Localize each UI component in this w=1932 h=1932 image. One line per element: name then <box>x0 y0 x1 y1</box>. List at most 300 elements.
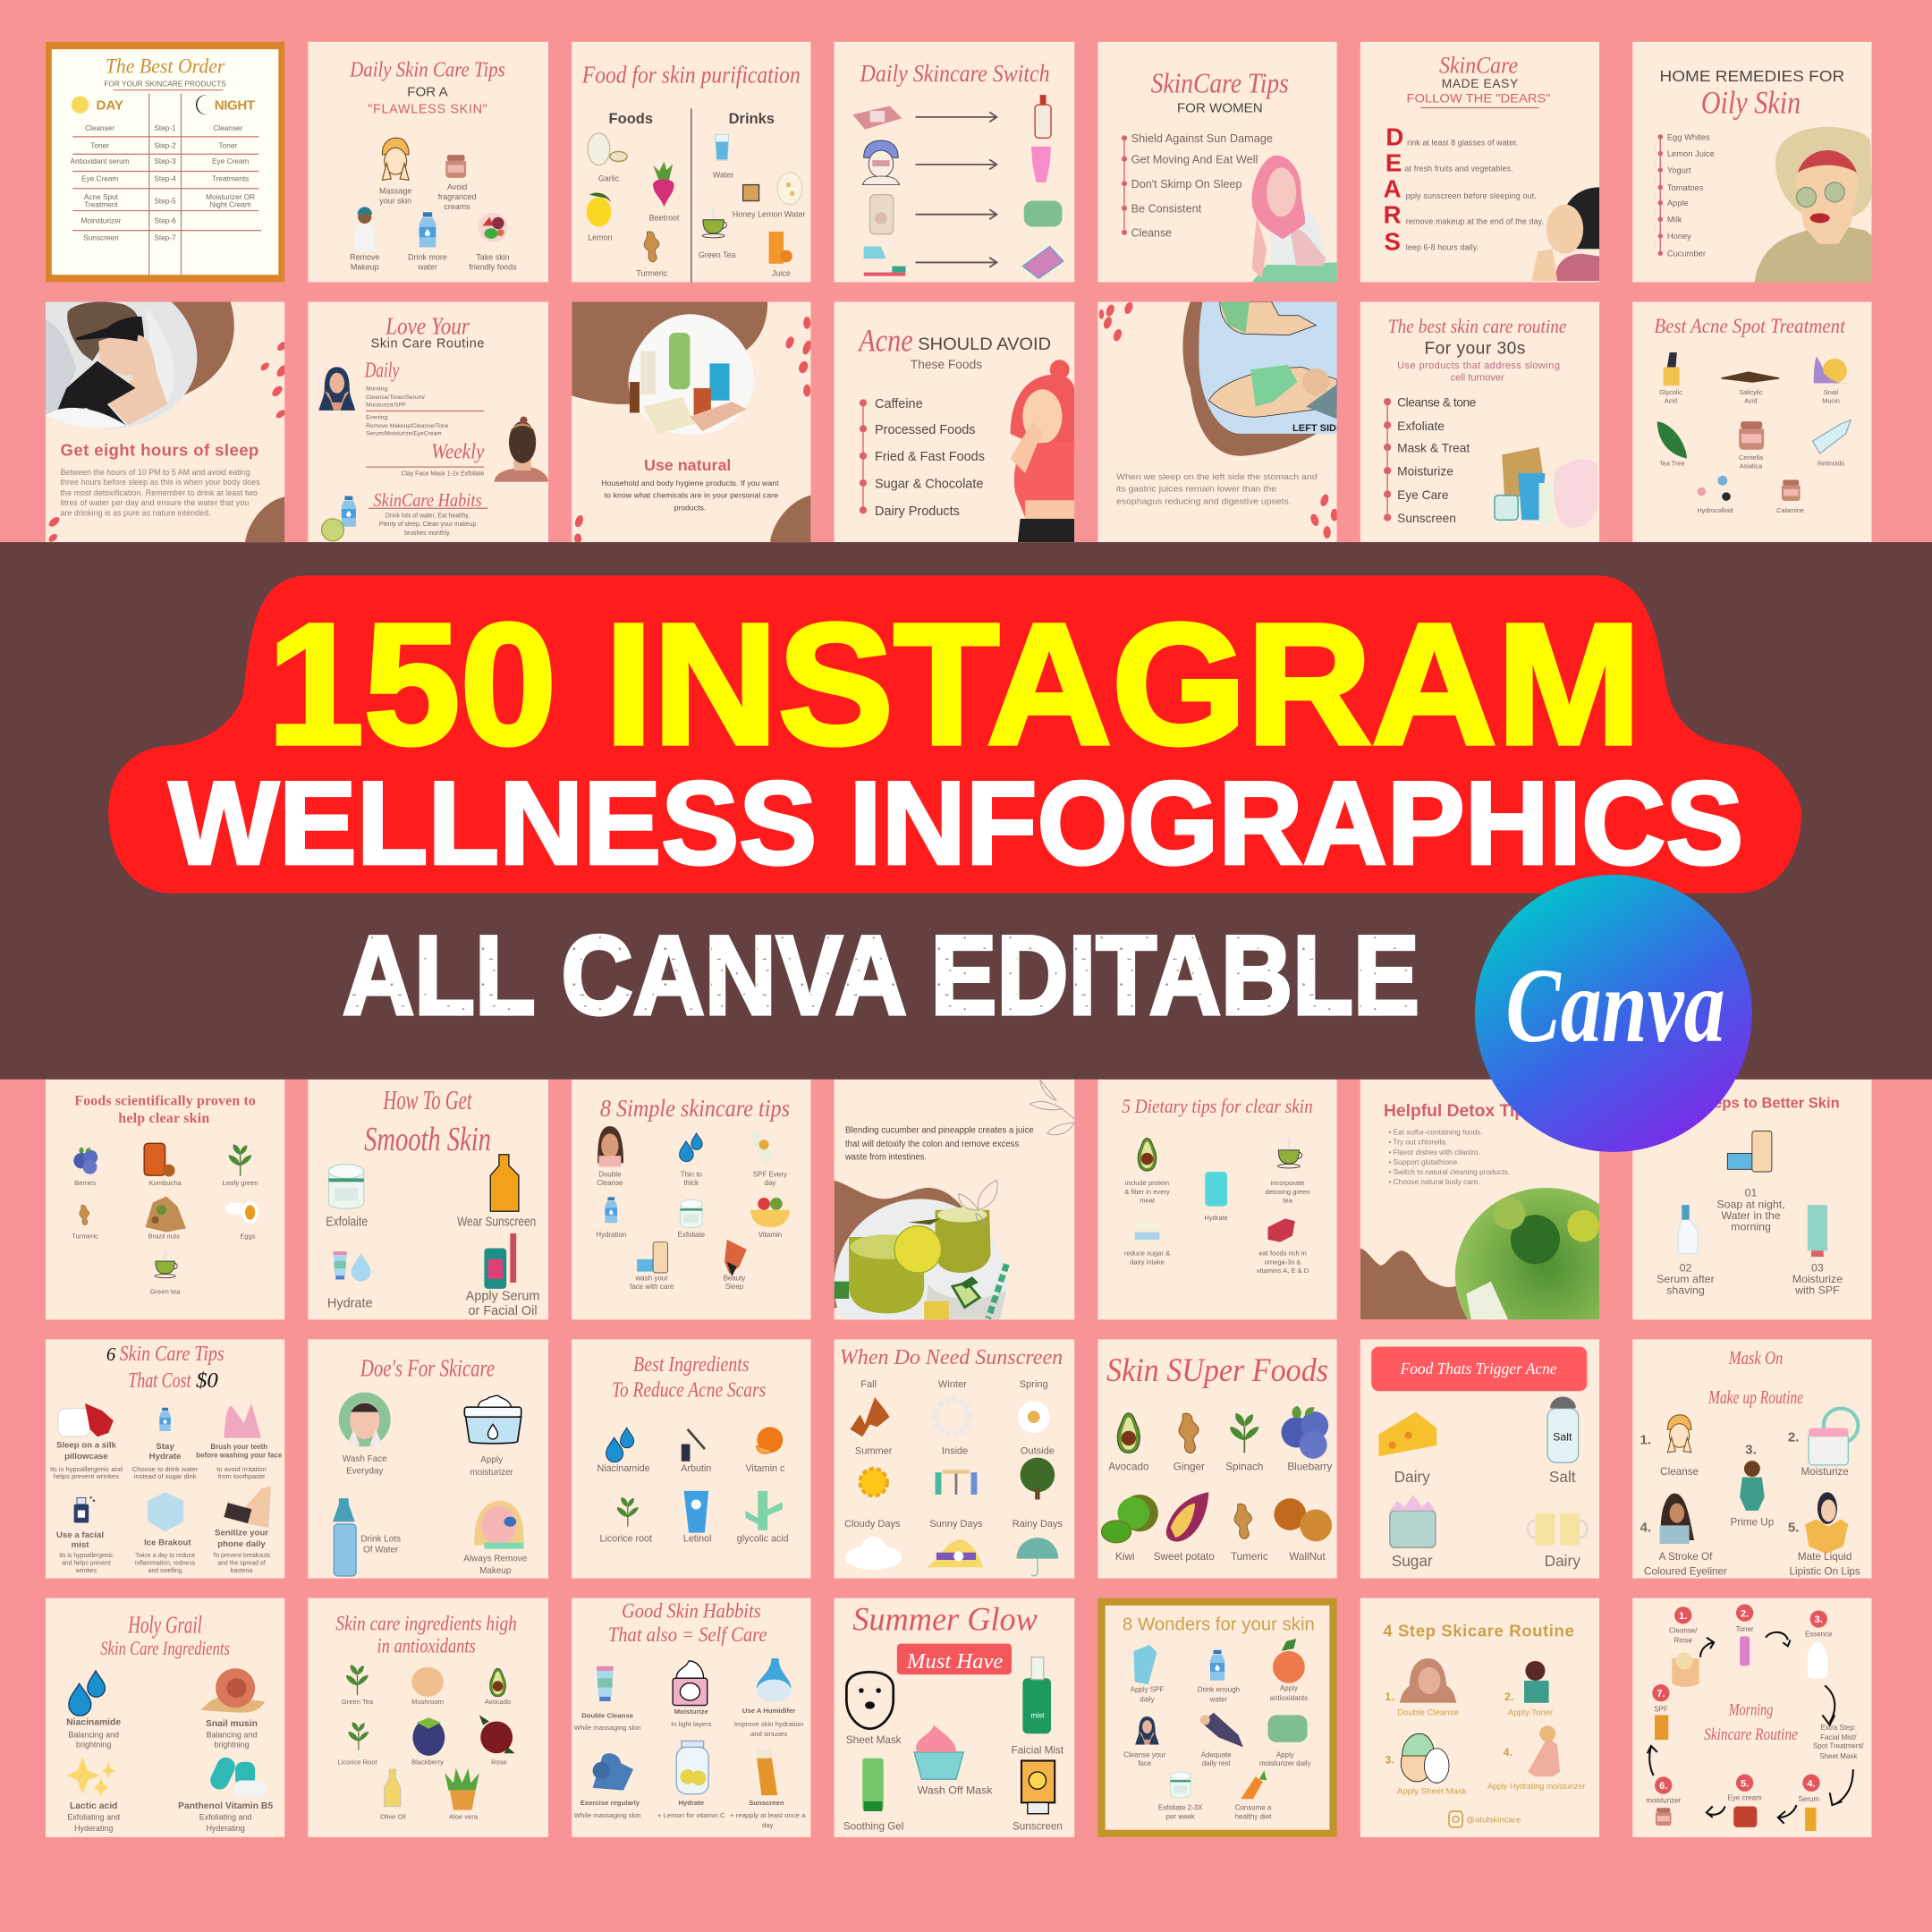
item: beetroot: Beetroot <box>649 214 680 223</box>
item: cloudy: Cloudy Days <box>844 1519 901 1530</box>
item: kiwi <box>1102 1495 1158 1563</box>
panel: how to get smooth skin <box>308 1080 548 1319</box>
item: facial mist: and helps prevent <box>62 1560 111 1566</box>
item: avocado <box>1108 1413 1149 1472</box>
list: Processed Foods <box>875 423 976 437</box>
heading line 2: To Reduce Acne Scars <box>612 1377 766 1402</box>
item: lactic acid <box>66 1757 120 1833</box>
item: fall <box>851 1379 890 1436</box>
item: spf <box>750 1130 787 1187</box>
item: spinach <box>1225 1413 1263 1472</box>
item: water <box>713 134 733 179</box>
step 2: Apply Toner <box>1508 1708 1554 1718</box>
icon: green jar <box>1024 201 1062 226</box>
item: moisturize: Moisturize <box>674 1707 709 1716</box>
step 4 <box>1487 1725 1585 1791</box>
item: honey lemon water <box>733 173 805 218</box>
item: green tea: Green Tea <box>699 250 736 259</box>
item: brazil nuts: Brazil nuts <box>148 1232 180 1240</box>
item: salicylic acid: Acid <box>1744 396 1758 404</box>
item: ginger: Ginger <box>1174 1461 1205 1472</box>
item: winter: Winter <box>938 1379 967 1390</box>
step 7 <box>1652 1684 1670 1740</box>
item: centella asiatica: Centella <box>1739 453 1764 462</box>
item: sheet mask: Sheet Mask <box>846 1734 902 1746</box>
table text: routine steps: Moisturizer OR <box>206 193 255 201</box>
item: rainy <box>1013 1519 1063 1576</box>
icon: water bottle and lemon <box>322 496 356 541</box>
item: panthenol <box>178 1755 273 1833</box>
subheading: follow the dears: FOLLOW THE "DEARS" <box>1406 91 1551 105</box>
item: exfoliate <box>1158 1772 1203 1820</box>
item: hydrate <box>657 1741 725 1819</box>
heading: 8 Simple skincare tips <box>600 1094 790 1122</box>
list: Sunscreen <box>1397 512 1456 525</box>
heading: Best Acne Spot Treatment <box>1654 315 1845 338</box>
illustration: left side sleeping diagram <box>1182 302 1343 456</box>
item: honey lemon water: Honey Lemon Water <box>733 209 805 218</box>
item: skin friendly foods: Take skin <box>476 253 510 262</box>
section: daily: Morning: <box>366 386 389 393</box>
item: snail musin: Snail musin <box>206 1719 258 1729</box>
item: cheese: Dairy <box>1394 1468 1430 1486</box>
item: thin to thick: thick <box>684 1179 699 1187</box>
item: spring <box>1018 1379 1050 1433</box>
acronym list <box>1384 123 1544 256</box>
item: silk pillow: helps prevent wrinkes <box>54 1472 119 1480</box>
photo block: green drink <box>1360 1188 1599 1320</box>
heading: Summer Glow <box>852 1602 1038 1639</box>
extra step text: Extra Step: <box>1821 1724 1856 1732</box>
list: Cleanse <box>1131 225 1172 239</box>
item: drink water: water <box>1209 1695 1227 1703</box>
item: sweet potato: Sweet potato <box>1154 1551 1215 1563</box>
item: facial mist: Use a facial <box>56 1530 104 1540</box>
heading: SkinCare Tips <box>1151 67 1289 98</box>
panel: helpful detox tips <box>1360 1080 1638 1363</box>
item: cake: Sugar <box>1392 1552 1433 1570</box>
item: retinoids <box>1812 420 1851 468</box>
item: double cleanse <box>597 1126 623 1187</box>
item: healthy diet <box>1235 1771 1272 1820</box>
item: green tea <box>342 1665 374 1706</box>
heading: Holy Grail <box>128 1610 202 1638</box>
item: moisturizer: moisturizer <box>470 1468 514 1478</box>
item: drink more water <box>408 212 447 272</box>
item: skin friendly foods: friendly foods <box>469 263 517 272</box>
item: kombucha: Kombucha <box>149 1179 182 1187</box>
item: double cleanse: While massaging skin <box>574 1724 640 1732</box>
item: massage <box>379 138 411 205</box>
step 5: Eye cream <box>1728 1794 1762 1802</box>
table text: routine steps: Step-6 <box>154 216 176 225</box>
list: Mask & Treat <box>1397 442 1470 455</box>
section: daily: Cleanse/Toner/Serum/ <box>366 394 425 401</box>
panel: daily skin care tips <box>308 42 548 282</box>
illustration: skincare products <box>1495 447 1598 528</box>
item: remove makeup: Always Remove <box>463 1554 528 1563</box>
heading line 2: That also = Self Care <box>608 1623 767 1647</box>
panel: 8 wonders for your skin <box>1097 1598 1337 1837</box>
item: snail musin <box>201 1668 265 1749</box>
table text: routine steps: Toner <box>90 141 109 149</box>
item: water: Water <box>713 170 733 179</box>
item: juice <box>769 232 792 278</box>
step 7: SPF <box>1654 1705 1668 1713</box>
item: licorice: Licorice root <box>600 1533 652 1544</box>
item: beetroot <box>649 161 680 223</box>
panel: the best order: DAY <box>96 98 123 114</box>
item: antioxidants <box>1270 1639 1308 1702</box>
heading: 8 Wonders for your skin <box>1123 1615 1315 1635</box>
item: lemon <box>587 193 613 242</box>
step 03: with SPF <box>1794 1284 1840 1296</box>
item: blackberry <box>411 1717 445 1767</box>
extra step text: Sheet Mask <box>1819 1752 1857 1760</box>
heading: Get eight hours of sleep <box>61 441 258 460</box>
step 1: 1. <box>1385 1690 1394 1703</box>
item: sunscreen: day <box>762 1821 774 1829</box>
panel: daily skincare switch <box>835 42 1074 282</box>
item: lipstick: 5. <box>1788 1520 1799 1535</box>
item: sunscreen <box>730 1750 806 1829</box>
subheading: flawless skin: "FLAWLESS SKIN" <box>368 103 487 117</box>
table text: routine steps: Moinsturizer <box>80 216 122 225</box>
icon: face mask with blue towel <box>862 140 900 185</box>
item: serum <box>466 1233 539 1318</box>
step 2: Toner <box>1736 1625 1754 1633</box>
item: facial mist: wrinkes <box>75 1568 97 1574</box>
item: avocado <box>485 1668 511 1706</box>
section: daily: Daily <box>364 359 400 383</box>
panel: morning skincare routine <box>1632 1598 1871 1837</box>
item: skin friendly foods <box>469 213 517 272</box>
illustration: pink haired woman <box>1252 156 1337 282</box>
item: centella asiatica <box>1739 421 1764 470</box>
heading box: Food Thats Trigger Acne <box>1400 1360 1557 1377</box>
item: green tea: Green tea <box>150 1287 181 1295</box>
item: arbutin <box>681 1429 711 1474</box>
item: blackberry: Blackberry <box>411 1758 444 1767</box>
item: drink water <box>333 1498 401 1576</box>
item: avocado: Avocado <box>1108 1461 1149 1472</box>
item: silk pillow: Sleep on a silk <box>56 1441 117 1451</box>
illustration: woman with dark hair <box>1531 187 1599 281</box>
section: daily: Evening: <box>366 414 389 420</box>
item: beer: Dairy <box>1545 1552 1580 1570</box>
list: Egg Whites <box>1667 132 1710 141</box>
item: lipstick <box>1788 1492 1860 1578</box>
item: summer: Summer <box>855 1446 893 1457</box>
item: wash off mask <box>914 1725 993 1797</box>
item: cleanse: Cleanse <box>1660 1466 1699 1478</box>
step 02: Serum after <box>1657 1273 1715 1285</box>
item: licorice <box>600 1497 652 1544</box>
heading: Skin Care Tips <box>120 1342 225 1366</box>
item: sunny: Sunny Days <box>929 1519 983 1530</box>
item: cleanse <box>1640 1415 1699 1478</box>
text block: three hours before sleep as this is when your body does <box>61 478 260 487</box>
item: remove makeup: Remove <box>350 253 379 262</box>
item: spf: day <box>765 1179 775 1187</box>
item: reduce sugar <box>1124 1216 1170 1266</box>
item: berries: Berries <box>74 1179 96 1187</box>
canva badge <box>1475 875 1752 1152</box>
item: thin to thick: Thin to <box>681 1171 703 1179</box>
item: brush teeth: to avoid irritation <box>216 1465 267 1473</box>
item: garlic: Garlic <box>598 174 620 183</box>
step 01: Water in the <box>1721 1209 1781 1222</box>
step 2 <box>1504 1661 1554 1718</box>
heading: 6 <box>106 1345 116 1365</box>
table text: routine steps: Toner <box>219 141 237 149</box>
panel: the best order <box>46 42 284 282</box>
heading: Foods scientifically proven to <box>74 1094 256 1109</box>
heading: How To Get <box>383 1085 473 1115</box>
step 4: 4. <box>1504 1746 1513 1758</box>
item: lactic acid: Exfoliating and <box>67 1813 120 1822</box>
text block: its gastric juices remain lower than the <box>1116 485 1276 495</box>
subheading: Skin Care Routine <box>371 336 484 351</box>
item: facial mist: Its is hypoallergenic <box>59 1553 114 1559</box>
step 1: 1. <box>1679 1611 1687 1622</box>
item: avocado: Avocado <box>485 1698 511 1706</box>
step 03 <box>1792 1205 1843 1296</box>
item: wash your face: face with care <box>630 1283 674 1291</box>
item: brush teeth <box>196 1403 283 1480</box>
list: Shield Against Sun Damage <box>1131 131 1273 145</box>
item: turmeric: Turmeric <box>72 1232 98 1240</box>
icon: pink cleanser <box>1031 147 1051 182</box>
item: beauty sleep <box>724 1240 747 1291</box>
icon: pump bottle <box>1035 95 1051 138</box>
item: soothing gel: Soothing Gel <box>843 1821 903 1833</box>
heading: smooth skin: Smooth Skin <box>364 1121 491 1158</box>
heading line 2: Make up Routine <box>1707 1388 1803 1408</box>
item: outside: Outside <box>1021 1446 1055 1457</box>
item: niacinamide <box>597 1428 650 1474</box>
item: hydrocolloid <box>1697 476 1733 514</box>
list: Cleanse & tone <box>1397 396 1477 410</box>
item: wash your face <box>630 1242 674 1291</box>
section: skincare habits: Plenty of sleep, Clean your makeup <box>379 521 476 528</box>
icon: sun <box>72 96 89 114</box>
table text: routine steps: Step-2 <box>154 141 176 149</box>
panel: best ingredients <box>572 1339 810 1579</box>
step 3 <box>1385 1733 1467 1797</box>
item: drink water: Of Water <box>363 1546 399 1555</box>
text block: the most detoxification. Remember to drink at least two <box>61 488 258 497</box>
item: cleanse <box>1123 1716 1166 1767</box>
panel: love your skin care routine <box>308 302 548 542</box>
item: berries <box>73 1148 97 1187</box>
step 2 <box>1736 1605 1754 1665</box>
item: drink more water: Drink more <box>408 253 447 262</box>
item: wash your face: wash your <box>635 1274 668 1282</box>
item: spf: SPF Every <box>753 1171 787 1179</box>
panel: steps to better skin <box>1632 1080 1871 1319</box>
heading: Daily Skincare Switch <box>860 59 1050 87</box>
subheading: These Foods <box>911 358 982 371</box>
item: exfoliate <box>678 1199 706 1239</box>
step 3: Apply Sheet Mask <box>1397 1787 1467 1797</box>
heading: Daily Skin Care Tips <box>349 57 505 81</box>
item: ice: Ice Brakout <box>144 1538 191 1547</box>
item: sunscreen: Sunscreen <box>749 1799 784 1807</box>
text block: When we sleep on the left side the stomach and <box>1116 472 1318 482</box>
acronym list: rink at least 8 glasses of water. <box>1407 139 1518 148</box>
heading: Use natural <box>644 456 731 474</box>
subheading: FOR WOMEN <box>1177 100 1263 115</box>
headline: 150 instagram: 150 INSTAGRAM <box>267 587 1641 780</box>
step 3: 3. <box>1815 1614 1823 1625</box>
text block: litres of water per day and ensure the water that you <box>61 498 249 507</box>
list <box>1657 132 1715 258</box>
section: weekly: Weekly <box>431 439 485 463</box>
step 2: 2. <box>1741 1608 1749 1619</box>
item: lactic acid: Hyderating <box>74 1824 113 1833</box>
table text: routine steps: Sunscreen <box>83 234 119 242</box>
panel: summer glow <box>835 1598 1074 1837</box>
text block <box>1397 360 1560 384</box>
text block: Household and body hygiene products. If you want <box>601 479 779 487</box>
item: drink more water: water <box>417 263 437 272</box>
item: calamine: Calamine <box>1776 506 1804 514</box>
item: beauty sleep: Beauty <box>724 1274 745 1282</box>
item: ice <box>135 1492 196 1574</box>
photo block: green juice <box>834 1181 1010 1320</box>
step 03: 03 <box>1811 1262 1824 1275</box>
instagram handle: @atulskincare <box>1466 1815 1521 1825</box>
item: omega: vitamins A, E & D <box>1257 1267 1309 1275</box>
list: Lemon Juice <box>1667 149 1715 158</box>
text block: that will detoxify the colon and remove excess <box>845 1140 1019 1149</box>
step 7: 7. <box>1657 1689 1665 1699</box>
item: moisturize <box>1788 1409 1858 1478</box>
subheading: FOR A <box>407 84 449 99</box>
panel: the best order: NIGHT <box>215 98 256 114</box>
item: wear sunscreen <box>457 1155 536 1230</box>
item: double cleanse: Double <box>598 1171 622 1179</box>
item: omega: omega-3s & <box>1265 1258 1301 1266</box>
item: exfoliate <box>326 1165 368 1230</box>
list: Honey <box>1667 232 1691 241</box>
table text: routine steps: Eye Cream <box>212 157 249 165</box>
heading line 2: That Cost <box>128 1368 191 1393</box>
list: Tomatoes <box>1667 183 1704 192</box>
item: outside <box>1021 1446 1055 1499</box>
list: • Try out chlorella. <box>1389 1139 1447 1147</box>
item: ice: inflammation, redness <box>135 1560 196 1566</box>
item: calamine <box>1776 480 1804 514</box>
item: sunny <box>927 1519 983 1567</box>
item: avoid creams: creams <box>444 202 470 211</box>
item: exercise <box>574 1753 640 1819</box>
photo block: sleeping woman <box>46 302 234 429</box>
panel: foods that trigger acne <box>1360 1339 1599 1579</box>
step 02 <box>1657 1205 1715 1296</box>
text block <box>601 479 779 512</box>
step 01: Soap at night, <box>1716 1199 1785 1211</box>
step 3: Essence <box>1805 1630 1833 1638</box>
text block <box>61 468 260 518</box>
item: exercise: While massaging skin <box>574 1811 640 1819</box>
item: hydrate: Hydrate <box>678 1799 705 1807</box>
item: remove makeup <box>350 207 379 272</box>
item: brush teeth: from toothpaste <box>218 1472 265 1480</box>
item: glycolic acid: glycolic acid <box>737 1533 789 1544</box>
list: Moisturize <box>1397 465 1453 479</box>
text block: cell turnover <box>1451 373 1504 384</box>
panel: skin super foods <box>1097 1339 1337 1579</box>
item: sunscreen: + reapply at least once a <box>730 1811 806 1819</box>
item: salt <box>1547 1397 1579 1486</box>
heading line 2: in antioxidants <box>377 1634 476 1657</box>
panel: dears <box>1360 42 1599 282</box>
panel: 8 simple skincare tips <box>572 1080 810 1319</box>
step 6: moisturizer <box>1646 1796 1682 1804</box>
decoration: corner blob and drops <box>574 317 810 542</box>
item: tea tree <box>1657 421 1687 468</box>
item: phone: phone daily <box>217 1539 266 1549</box>
step 1: Rinse <box>1674 1636 1692 1644</box>
item: arbutin: Arbutin <box>681 1463 711 1474</box>
heading: HOME REMEDIES FOR <box>1660 67 1844 85</box>
subheading: For your 30s <box>1424 339 1525 358</box>
item: exfoliate: Exfolaite <box>326 1216 368 1230</box>
item: stay hydrate: instead of sugar dink <box>134 1472 197 1480</box>
icon: woman with face mask <box>494 417 548 482</box>
instagram handle <box>1449 1811 1521 1827</box>
item: snail mucin <box>1814 356 1848 404</box>
text block: are drinking is as pure as nature intended. <box>61 509 211 518</box>
table text: routine steps: Night Cream <box>209 200 251 208</box>
item: hydrate: Hydrate <box>1204 1214 1228 1222</box>
item: healthy diet: Consume a <box>1235 1804 1272 1812</box>
heading: acne: Acne <box>857 323 913 359</box>
list: • Eat sulfur-containing foods. <box>1389 1129 1483 1137</box>
item: fall: Fall <box>860 1379 877 1390</box>
decoration: red drops <box>1098 302 1337 538</box>
panel: holy grail ingredients <box>46 1598 284 1837</box>
acronym list: leep 6-8 hours daily. <box>1406 243 1479 252</box>
badge: must have <box>897 1644 1012 1674</box>
list <box>860 397 985 519</box>
panel: food for skin purification <box>572 42 810 282</box>
list: Yogurt <box>1667 166 1691 175</box>
step 4 <box>1799 1775 1820 1831</box>
list <box>1122 131 1273 239</box>
item: glycolic acid: Acid <box>1665 396 1677 404</box>
red headline shape <box>108 575 1801 894</box>
acronym list: E <box>1385 148 1402 176</box>
item: sheet mask <box>846 1672 902 1746</box>
item: silk pillow: pillowcase <box>64 1452 108 1462</box>
decoration: corner blob and drops <box>48 342 284 542</box>
subheading: FOR YOUR SKINCARE PRODUCTS <box>104 80 226 88</box>
item: avoid creams: Avoid <box>447 182 467 191</box>
heading: 3 Steps to Better Skin <box>1687 1094 1840 1111</box>
heading: Mask On <box>1728 1349 1783 1368</box>
item: hydrate: Hydrate <box>327 1297 373 1311</box>
text block <box>844 1126 1034 1162</box>
item: green tea: incorporate <box>1271 1179 1304 1187</box>
item: retinoids: Retinoids <box>1818 460 1845 468</box>
panel: home remedies for oily skin <box>1632 42 1871 282</box>
item: facial mist: Faicial Mist <box>1012 1744 1064 1756</box>
item: vitamin c: Vitamin c <box>745 1463 785 1474</box>
item: drink water: Drink Lots <box>360 1534 401 1544</box>
